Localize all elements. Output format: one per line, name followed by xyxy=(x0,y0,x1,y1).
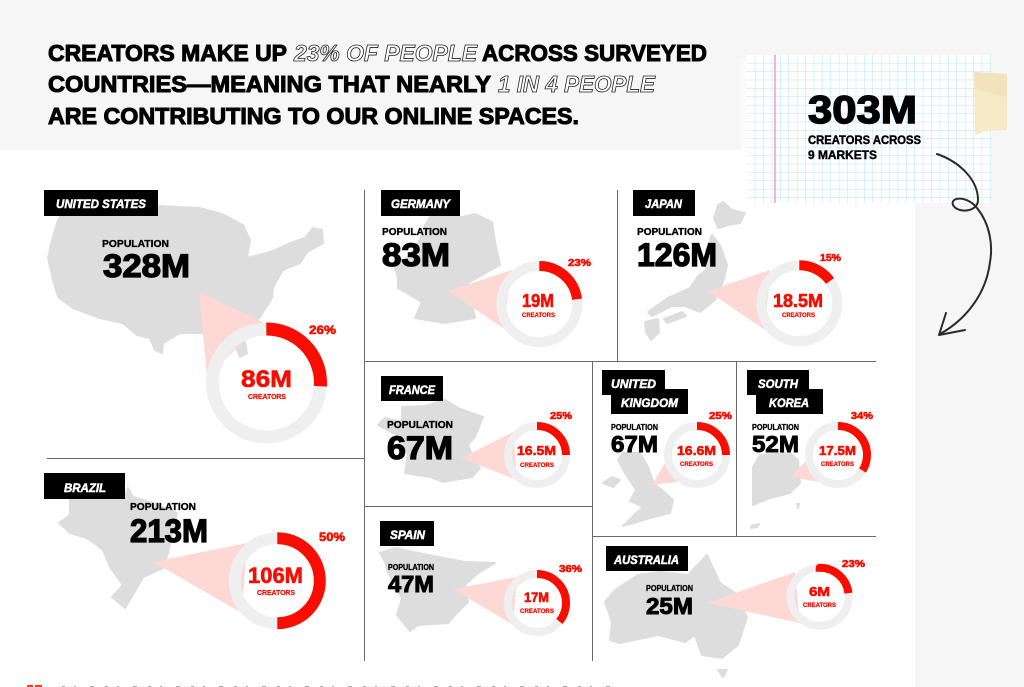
creators: 106M xyxy=(248,563,303,588)
panel: Japan xyxy=(633,190,842,341)
creators: CREATORS xyxy=(520,609,554,615)
country label xyxy=(747,370,823,414)
population: POPULATION xyxy=(387,419,453,431)
donut chart: 15% xyxy=(761,265,837,341)
population: POPULATION xyxy=(752,423,799,432)
creators: 36% xyxy=(559,563,583,575)
population: 67M xyxy=(387,430,453,466)
creators xyxy=(522,257,592,319)
creators xyxy=(773,252,842,319)
country label xyxy=(381,376,443,401)
creators: CREATORS xyxy=(803,603,836,609)
population: 328M xyxy=(103,248,190,284)
creators: 86M xyxy=(241,366,292,393)
map: Germany xyxy=(395,214,500,323)
creators: 15% xyxy=(820,252,842,264)
creators: 23% xyxy=(568,257,592,269)
country label: AUSTRALIA xyxy=(613,553,679,567)
creators xyxy=(520,563,583,615)
graph-paper note xyxy=(741,55,1007,203)
country label: UNITED STATES xyxy=(56,197,146,211)
population: 126M xyxy=(637,237,717,273)
callout cone xyxy=(448,270,512,328)
creators: 34% xyxy=(851,410,874,422)
country label xyxy=(606,546,688,571)
panel: Spain xyxy=(380,521,583,632)
country label: BRAZIL xyxy=(64,481,106,495)
population: 83M xyxy=(382,237,450,273)
panel: France xyxy=(378,376,573,484)
creators: 25% xyxy=(709,410,733,422)
creators xyxy=(241,323,336,401)
callout cone xyxy=(790,460,820,482)
map: Japan xyxy=(645,202,745,340)
creators: 6M xyxy=(809,584,830,599)
creators: CREATORS xyxy=(782,313,815,319)
creators: CREATORS xyxy=(520,463,554,469)
footnote cut off at page bottom xyxy=(27,685,610,687)
country label: SOUTH xyxy=(758,377,798,391)
country label: JAPAN xyxy=(645,197,682,211)
population: 25M xyxy=(646,593,693,619)
panel: Australia xyxy=(605,546,866,677)
population: POPULATION xyxy=(102,238,169,250)
donut chart: 25% xyxy=(508,426,566,484)
callout cone xyxy=(461,432,517,480)
country label xyxy=(602,370,688,414)
donut chart: 36% xyxy=(508,574,566,632)
callout cone xyxy=(453,577,517,625)
country label: UNITED xyxy=(611,377,656,391)
callout cone xyxy=(652,463,678,485)
donut chart: 26% xyxy=(212,329,320,437)
country label: KINGDOM xyxy=(621,396,679,410)
creators: 25% xyxy=(550,410,573,422)
title: 1 IN 4 PEOPLE xyxy=(498,71,656,97)
population: 47M xyxy=(388,571,434,597)
country label: GERMANY xyxy=(391,197,451,211)
callout cone xyxy=(707,572,800,623)
map: Brazil xyxy=(59,488,177,608)
title: ARE CONTRIBUTING TO OUR ONLINE SPACES. xyxy=(48,103,579,129)
panel: United Kingdom xyxy=(602,370,733,526)
country label: SPAIN xyxy=(390,528,425,542)
map: France xyxy=(378,400,483,482)
grid divider lines xyxy=(47,190,876,661)
creators xyxy=(803,558,866,609)
creators: 16.5M xyxy=(517,443,556,458)
panel: Germany xyxy=(381,190,592,342)
creators: CREATORS xyxy=(522,313,555,319)
population: POPULATION xyxy=(611,423,658,432)
creators: 17M xyxy=(524,590,549,605)
country label xyxy=(44,190,158,216)
torn paper edge xyxy=(741,58,749,200)
country label xyxy=(44,473,125,499)
creators xyxy=(248,530,345,597)
population: POPULATION xyxy=(388,563,434,572)
paper grid xyxy=(747,55,991,203)
creators: CREATORS xyxy=(680,462,713,468)
total figure: 303M xyxy=(808,89,917,132)
creators: 17.5M xyxy=(819,443,856,458)
creators: 23% xyxy=(842,558,866,570)
creators xyxy=(819,410,874,468)
population: POPULATION xyxy=(130,501,196,513)
callout cone xyxy=(153,543,247,613)
map: United States xyxy=(48,206,323,357)
creators: CREATORS xyxy=(821,462,854,468)
creators: 19M xyxy=(522,291,554,311)
title xyxy=(48,40,707,129)
creators xyxy=(517,410,573,469)
map: South Korea xyxy=(751,453,800,528)
total caption xyxy=(808,135,921,162)
total caption: 9 MARKETS xyxy=(808,150,877,162)
title: 23% OF PEOPLE xyxy=(293,40,478,66)
creators: 26% xyxy=(309,323,336,337)
donut chart: 34% xyxy=(809,426,867,484)
creators: CREATORS xyxy=(257,590,295,597)
population: 52M xyxy=(752,431,799,457)
total caption: CREATORS ACROSS xyxy=(808,135,921,147)
panel: United States xyxy=(44,190,336,437)
map: United Kingdom xyxy=(603,453,673,526)
callout cone xyxy=(708,270,770,330)
title: ACROSS SURVEYED xyxy=(482,40,707,66)
donut chart: 23% xyxy=(791,568,849,626)
creators: 18.5M xyxy=(773,291,823,311)
callout cone xyxy=(199,292,263,377)
map: Australia xyxy=(605,555,747,677)
creators: CREATORS xyxy=(248,394,286,401)
white content panel xyxy=(0,150,915,687)
country label xyxy=(381,190,460,216)
paper sheet xyxy=(747,55,991,203)
country label: KOREA xyxy=(769,396,809,410)
donut chart: 25% xyxy=(668,426,726,484)
creators: 16.6M xyxy=(677,443,716,458)
population: 67M xyxy=(611,431,658,457)
population: POPULATION xyxy=(637,226,702,238)
panel: South Korea xyxy=(747,370,874,528)
country label xyxy=(380,521,434,546)
tape xyxy=(974,72,1007,135)
creators: 50% xyxy=(319,530,345,544)
population: POPULATION xyxy=(382,226,447,238)
map: Spain xyxy=(380,548,495,631)
country label xyxy=(633,190,695,216)
margin line xyxy=(774,55,776,203)
creators xyxy=(677,410,733,468)
population: 213M xyxy=(130,513,208,549)
population: POPULATION xyxy=(646,584,693,593)
panel: Brazil xyxy=(44,473,345,623)
title: CREATORS MAKE UP xyxy=(48,40,287,66)
donut chart: 50% xyxy=(235,538,320,623)
donut chart: 23% xyxy=(501,266,577,342)
title: COUNTRIES—MEANING THAT NEARLY xyxy=(48,71,491,97)
country label: FRANCE xyxy=(389,383,436,397)
arrow: hand-drawn curl from note to map panels xyxy=(937,154,991,335)
